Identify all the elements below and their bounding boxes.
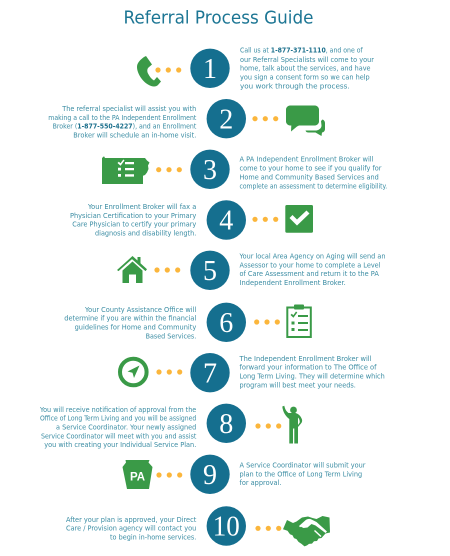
description text — [48, 104, 196, 139]
description text — [39, 405, 197, 449]
description text — [239, 251, 386, 287]
step 7 — [120, 353, 385, 392]
description text — [240, 460, 366, 487]
description text: Office of Long Term Living and you will be assigned — [40, 414, 196, 423]
number badge 1 — [190, 49, 230, 88]
description text: to begin in-home services. — [110, 533, 196, 542]
icon: handshake — [283, 516, 330, 546]
step 8 — [39, 404, 302, 449]
description text: Service Coordinator will meet with you and assist — [41, 431, 196, 440]
number badge 4: 4 — [219, 206, 233, 237]
description text — [70, 202, 197, 238]
step 10 — [66, 506, 330, 546]
step 2 — [48, 99, 325, 139]
step 4 — [70, 200, 313, 240]
description text: Care / Provision agency will contact you — [66, 524, 196, 533]
description text: home, talk about the services, and have — [240, 64, 371, 73]
description text: You will receive notification of approval from the — [39, 405, 197, 414]
connector dots — [254, 319, 280, 325]
description text: Your County Assistance Office will — [84, 305, 196, 314]
icon: clipboard checklist — [287, 304, 311, 337]
step 5 — [117, 251, 386, 290]
connector dots — [155, 67, 181, 73]
icon: house — [117, 256, 147, 283]
icon: check box — [285, 205, 313, 233]
number badge 9: 9 — [203, 460, 217, 491]
icon: phone — [137, 56, 161, 86]
step 9 — [122, 455, 366, 494]
title: Referral Process Guide — [124, 8, 314, 28]
icon: keystone PA: PA — [130, 472, 145, 484]
number badge 2: 2 — [219, 104, 233, 135]
description text: Independent Enrollment Broker. — [240, 278, 346, 287]
number badge 2 — [207, 99, 246, 138]
description text: complete an assessment to determine eligibility. — [240, 181, 387, 190]
description text: Physician Certification to your Primary — [70, 211, 197, 220]
description text: program will best meet your needs. — [240, 381, 356, 390]
description text: After your plan is approved, your Direct — [66, 515, 196, 524]
description text: The Independent Enrollment Broker will — [239, 354, 372, 363]
connector dots — [255, 526, 281, 531]
number badge 6 — [207, 303, 246, 342]
number badge 3: 3 — [203, 155, 217, 186]
icon: chat bubbles — [286, 106, 325, 136]
description text: Your Enrollment Broker will fax a — [87, 202, 196, 211]
connector dots — [154, 267, 180, 273]
description text — [240, 46, 374, 90]
description text: you with creating your Individual Service Plan. — [44, 440, 196, 449]
description text: forward your information to The Office of — [240, 363, 377, 372]
number badge 7 — [190, 353, 230, 392]
description text: A Service Coordinator will submit your — [240, 460, 366, 469]
description text — [240, 155, 387, 190]
number badge 6: 6 — [219, 308, 233, 339]
connector dots — [255, 423, 281, 429]
connector dots — [156, 167, 182, 172]
description text: Long Term Living. They will determine which — [240, 372, 385, 381]
number badge 1: 1 — [203, 54, 217, 85]
description text: a Service Coordinator. Your newly assigned — [56, 423, 196, 432]
description text — [239, 354, 385, 390]
number badge 9 — [190, 455, 230, 494]
icon: keystone PA — [122, 460, 152, 489]
connector dots — [156, 472, 182, 478]
number badge 10 — [207, 506, 246, 546]
description text: our Referral Specialists will come to your — [240, 55, 374, 64]
description text: guidelines for Home and Community — [75, 323, 197, 332]
connector dots — [156, 369, 182, 375]
description text: The referral specialist will assist you with — [61, 104, 196, 113]
number badge 8 — [207, 404, 246, 443]
number badge 7: 7 — [203, 358, 217, 389]
description text: Broker (1-877-550-4227), and an Enrollment — [53, 122, 196, 131]
description text: you sign a consent form so we can help — [240, 73, 370, 82]
description text: A PA Independent Enrollment Broker will — [240, 155, 374, 164]
description text: you work through the process. — [240, 81, 350, 90]
description text: Call us at 1-877-371-1110, and one of — [240, 46, 363, 55]
icon: compass — [120, 359, 147, 385]
description text: determine if you are within the financial — [64, 314, 196, 323]
connector dots — [252, 116, 278, 121]
description text: come to your home to see if you qualify for — [240, 164, 382, 173]
description text: Home and Community Based Services and — [240, 172, 379, 181]
number badge 4 — [207, 200, 246, 240]
description text: Your local Area Agency on Aging will send an — [239, 251, 386, 260]
step 1 — [137, 46, 374, 90]
description text: of Care Assessment and return it to the PA — [240, 269, 379, 278]
step 3 — [102, 150, 387, 190]
description text: Broker will schedule an in-home visit. — [73, 130, 196, 139]
description text: Care Physician to certify your primary — [72, 220, 197, 229]
description text: diagnosis and disability length. — [95, 229, 196, 238]
description text: Based Services. — [146, 331, 196, 340]
description text: for approval. — [240, 478, 282, 487]
description text: making a call to the PA Independent Enrollment — [48, 113, 196, 122]
description text — [66, 515, 196, 542]
number badge 8: 8 — [219, 409, 233, 440]
step 6 — [64, 303, 311, 342]
number badge 5 — [190, 251, 230, 290]
description text: Assessor to your home to complete a Level — [240, 260, 380, 269]
connector dots — [252, 217, 278, 222]
description text: plan to the Office of Long Term Living — [240, 469, 362, 478]
icon: Pennsylvania map checklist — [102, 156, 150, 184]
icon: person raising hand — [282, 406, 302, 444]
description text — [64, 305, 197, 340]
number badge 5: 5 — [203, 256, 217, 287]
number badge 10: 10 — [213, 512, 240, 543]
number badge 3 — [190, 150, 230, 189]
